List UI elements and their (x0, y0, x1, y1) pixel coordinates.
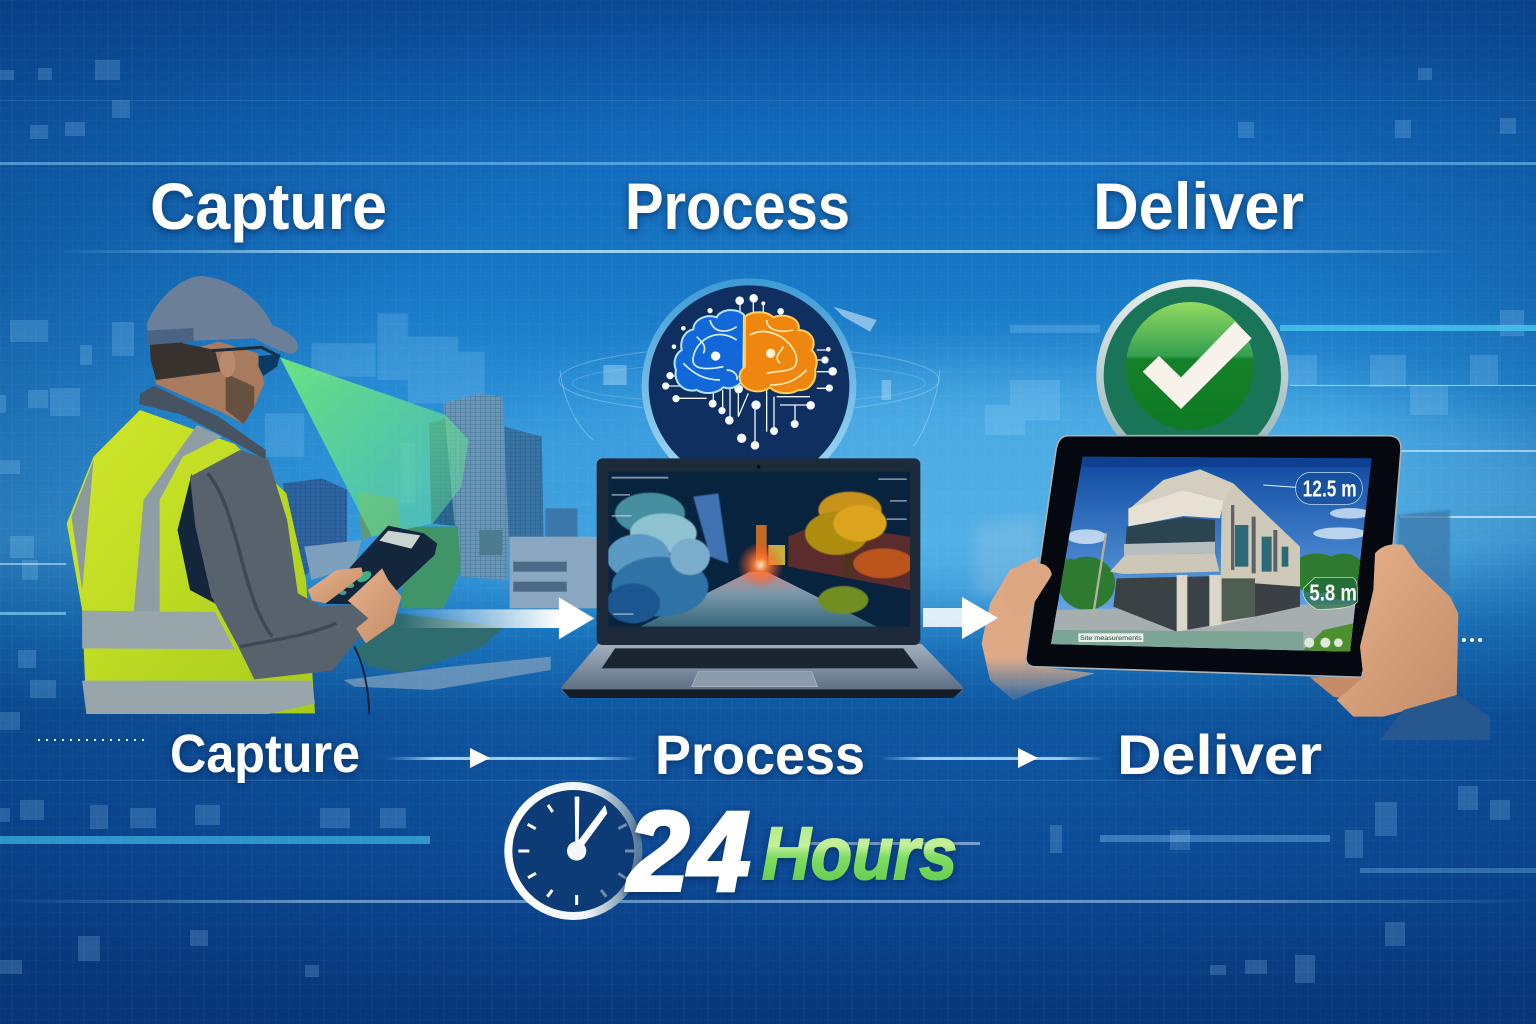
scanner beam (280, 357, 469, 537)
screen UI text bars (612, 477, 907, 615)
lamp post (1093, 533, 1106, 618)
ground (1050, 603, 1370, 653)
check mark (1143, 322, 1252, 409)
right hand (1337, 544, 1458, 717)
front upper fascia (1128, 490, 1223, 527)
Hours: Hours (762, 812, 957, 895)
balcony rail (1124, 542, 1215, 555)
handheld scanner (326, 526, 437, 604)
safety vest (67, 410, 315, 714)
point-cloud trees, left (607, 493, 728, 623)
tablet top bar (1080, 456, 1372, 467)
clock icon (508, 786, 638, 916)
jacket sleeve (1380, 695, 1490, 740)
caption text: Site measurements (1080, 635, 1142, 642)
step label: Deliver: Deliver (1117, 723, 1322, 786)
capture scene: city and worker (67, 276, 600, 714)
bottom bar (1050, 630, 1303, 652)
heading: Deliver: Deliver (1093, 169, 1304, 243)
roof block (1130, 469, 1233, 508)
laptop base (562, 644, 963, 698)
data arrow 2 (923, 597, 998, 639)
webcam (757, 465, 760, 468)
measurement: 5.8 m (1303, 577, 1357, 609)
right side dots (1462, 638, 1482, 642)
measurement: 12.5 m (1263, 472, 1362, 504)
circuit traces (663, 295, 836, 449)
hands (308, 567, 401, 643)
measurement: 12.5 m: 12.5 m (1303, 476, 1357, 502)
brain badge (642, 278, 856, 493)
city skyline (265, 313, 600, 690)
head (149, 323, 264, 424)
laptop (562, 458, 963, 698)
shirt and sleeve (139, 386, 371, 679)
data arrow 1 (401, 597, 594, 639)
laptop screen (607, 472, 913, 627)
measurement: 5.8 m: 5.8 m (1309, 580, 1357, 606)
trees (1058, 553, 1367, 610)
caption chip (1078, 633, 1143, 642)
clock hands (567, 797, 607, 861)
left thumb (1003, 562, 1052, 617)
data orbit rings (559, 307, 940, 447)
balcony slab (1110, 553, 1219, 574)
clock ticks (518, 805, 636, 905)
point-cloud trees, right (805, 492, 913, 614)
clouds (1067, 508, 1370, 544)
heading: Capture: Capture (150, 169, 387, 243)
side face (1220, 483, 1300, 625)
tablet (1026, 436, 1401, 677)
check badge (1096, 279, 1288, 471)
24: 24 (626, 789, 750, 914)
cable (354, 647, 369, 714)
heading rules (60, 250, 1460, 253)
base front edge (562, 689, 963, 698)
laptop lid (597, 458, 920, 645)
cap (147, 276, 298, 354)
road (640, 572, 877, 627)
buildings and glow (737, 523, 910, 590)
ground floor (1113, 576, 1220, 632)
sunglasses (212, 347, 280, 376)
tablet screen (1050, 455, 1373, 655)
flow arrow: process to deliver (880, 748, 1105, 768)
brain: blue hemisphere (675, 310, 744, 393)
heading: Process: Process (625, 169, 850, 243)
upper windows (1125, 517, 1215, 555)
brain: orange hemisphere (740, 312, 817, 393)
side windows and pilasters (1231, 505, 1288, 573)
building (1110, 469, 1300, 632)
left dotted line (38, 739, 150, 741)
deliver scene: check badge and tablet (982, 279, 1490, 740)
step label: Capture: Capture (170, 724, 360, 784)
right fingers behind tablet (1310, 675, 1363, 703)
step label: Process: Process (655, 723, 865, 786)
process scene: AI brain and laptop (559, 278, 963, 698)
screen icons (1304, 638, 1343, 648)
trackpad (692, 672, 818, 687)
keyboard (602, 648, 918, 668)
left hand back (982, 557, 1095, 700)
flow arrow: capture to process (385, 748, 640, 768)
lawn (1303, 623, 1353, 653)
